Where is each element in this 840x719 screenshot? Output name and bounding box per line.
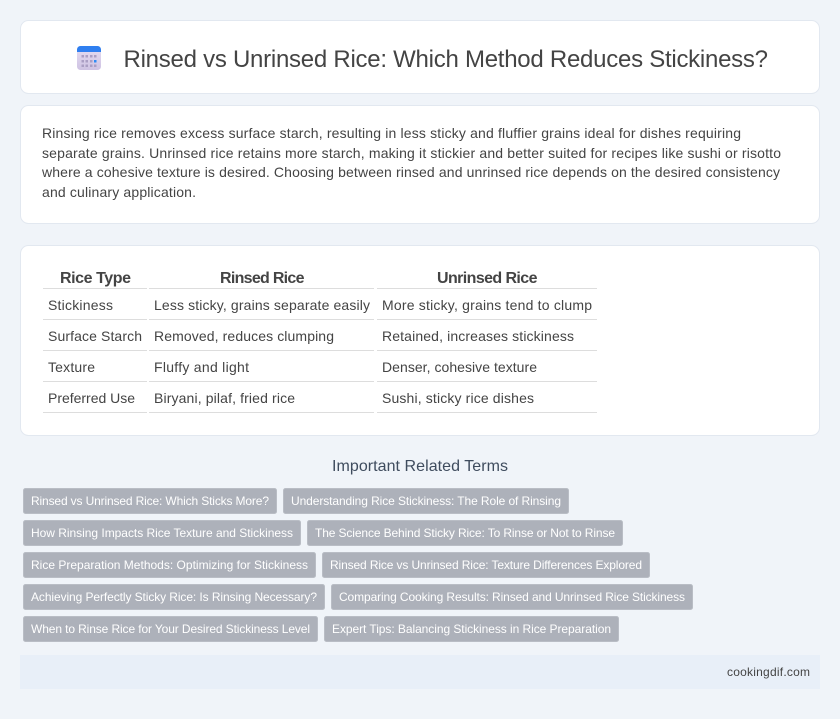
tag (284, 488, 568, 514)
tag: Rice Preparation Methods: Optimizing for Stickiness (31, 558, 308, 572)
icon: calendar (77, 46, 101, 70)
tag (24, 520, 300, 546)
table row: surface starch (48, 328, 574, 344)
panel: title header (20, 20, 820, 94)
related term tags (24, 488, 692, 642)
tag (324, 616, 618, 642)
tag (24, 616, 318, 642)
tag: The Science Behind Sticky Rice: To Rinse or Not to Rinse (315, 526, 615, 540)
table row: preferred use: Biryani, pilaf, fried rice (154, 390, 295, 406)
table row: texture: Fluffy and light (154, 359, 249, 375)
text block: intro (41, 125, 781, 200)
table row: preferred use: Sushi, sticky rice dishes (382, 390, 534, 406)
tag (24, 488, 276, 514)
tag: Rinsed Rice vs Unrinsed Rice: Texture Differences Explored (330, 558, 642, 572)
table header: Rinsed Rice (220, 270, 305, 287)
table row: texture: Texture (48, 359, 95, 375)
text block: intro: Rinsing rice removes excess surface starch, resulting in less sticky and fluffier grains ideal for dishes requiring (42, 125, 741, 141)
tag: Achieving Perfectly Sticky Rice: Is Rinsing Necessary? (31, 590, 317, 604)
table row: surface starch: Removed, reduces clumping (154, 328, 334, 344)
tag: How Rinsing Impacts Rice Texture and Stickiness (31, 526, 293, 540)
tag (308, 520, 622, 546)
table header: Rice Type (60, 270, 131, 287)
table header: Unrinsed Rice (437, 270, 538, 287)
heading: related terms: Important Related Terms (332, 458, 508, 475)
table row: preferred use: Preferred Use (48, 390, 135, 406)
tag: When to Rinse Rice for Your Desired Stickiness Level (31, 622, 310, 636)
table row: texture (48, 359, 537, 375)
table row: texture: Denser, cohesive texture (382, 359, 537, 375)
table row: stickiness: More sticky, grains tend to clump (382, 297, 592, 313)
tag: Understanding Rice Stickiness: The Role of Rinsing (291, 494, 561, 508)
tag: Expert Tips: Balancing Stickiness in Rice Preparation (332, 622, 611, 636)
text block: intro: where a cohesive texture is desired. Choosing between rinsed and unrinsed rice depends on the desired consistency (41, 164, 780, 180)
text block: intro: and culinary application. (42, 184, 196, 200)
table row: stickiness (48, 297, 592, 313)
tag (332, 584, 692, 610)
text block: intro: separate grains. Unrinsed rice retains more starch, making it stickier and better suited for recipes like sushi or risotto (42, 145, 781, 161)
tag: Rinsed vs Unrinsed Rice: Which Sticks More? (31, 494, 269, 508)
table row: stickiness: Less sticky, grains separate easily (154, 297, 370, 313)
tag (24, 584, 324, 610)
footer source: cookingdif.com (727, 665, 810, 679)
title: Rinsed vs Unrinsed Rice: Which Method Reduces Stickiness? (124, 46, 768, 73)
panel: intro paragraph (20, 106, 820, 224)
table row: surface starch: Retained, increases stickiness (382, 328, 574, 344)
panel: comparison table (20, 246, 820, 436)
table header (60, 270, 538, 287)
table row: preferred use (48, 390, 534, 406)
tag (24, 552, 316, 578)
table row: stickiness: Stickiness (48, 297, 113, 313)
table row: surface starch: Surface Starch (48, 328, 142, 344)
footer bar (20, 655, 820, 689)
tag (322, 552, 650, 578)
tag: Comparing Cooking Results: Rinsed and Unrinsed Rice Stickiness (339, 590, 685, 604)
